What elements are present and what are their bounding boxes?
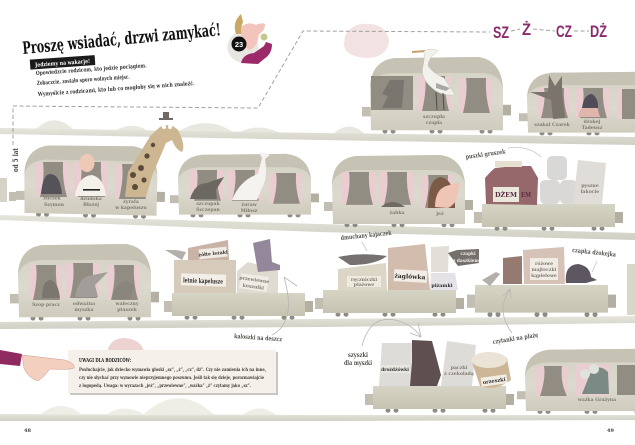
partial wagon right edge	[627, 264, 635, 315]
wagon A: zuczek, dzudoka, zyrafa: Szymon	[44, 202, 65, 208]
wagon E: zabka, jez: żabka	[390, 210, 404, 216]
jackal	[530, 75, 565, 119]
drozdzowki bag	[379, 343, 412, 386]
parents note: Posłuchajcie, jak dziecko wymawia głoski „sz”, „ż”, „cz”, dż”. Czy nie zamienia ich na inne,	[79, 367, 266, 373]
flat wagon F: jars and cans: DŻEM	[495, 190, 517, 199]
mascot with number 23: 23	[235, 40, 243, 49]
label: kaloszki na deszcz: kaloszki na deszcz	[234, 333, 283, 343]
flat wagon J: books, box, cap	[467, 247, 616, 317]
jam jars	[485, 166, 538, 205]
flat wagon L: food	[365, 340, 514, 413]
box: zolte lezaki	[188, 240, 229, 262]
mouse peeking	[165, 250, 186, 260]
box	[573, 160, 606, 204]
label: szyszki dla myszki	[344, 319, 421, 367]
paczki bag	[441, 341, 476, 386]
label: dmuchany kajaczek: dmuchany kajaczek	[340, 230, 392, 242]
flat wagon F: jars and cans: pyszne	[581, 184, 599, 189]
wagon B: szczupak, zuraw: szczupak	[196, 201, 220, 207]
crane	[232, 152, 270, 200]
rails	[0, 128, 635, 421]
label: dmuchany kajaczek	[340, 230, 392, 251]
wagon D: szakal, dzokej: dżokej	[584, 119, 601, 125]
subtitle tag: Jedziemy na wakacje!	[34, 59, 90, 69]
judoka	[75, 175, 106, 196]
sound letters: CZ	[556, 22, 572, 41]
label: szyszki dla myszki: dla myszki	[344, 360, 372, 367]
wagon A: zuczek, dzudoka, zyrafa: żyrafa	[123, 199, 139, 205]
wagon E: zabka, jez	[324, 155, 473, 227]
boots	[253, 239, 280, 272]
kayak	[338, 254, 387, 265]
wagon A: zuczek, dzudoka, zyrafa: dżudoka	[80, 196, 102, 202]
instructions	[36, 63, 195, 98]
title: Proszę wsiadać, drzwi zamykać!	[22, 20, 222, 59]
text: 49	[607, 428, 614, 434]
flat wagon L: food: orzeszki	[482, 377, 506, 386]
wagon G: szop, myszka, ptaszek: Szop pracz	[32, 302, 60, 308]
wagon D: szakal, dzokej	[519, 72, 635, 135]
label: czapka dzokejka: czapka dżokejka	[572, 247, 616, 259]
box: przewiewne koszulki	[237, 262, 278, 293]
sound letters: Ż	[522, 20, 531, 39]
wagon D: szakal, dzokej: Tadeusz	[582, 125, 603, 131]
wagon B: szczupak, zuraw: żuraw	[241, 202, 258, 208]
flat wagon H: boxes and boots: żółte leżaki	[198, 248, 228, 259]
flat wagon I: kajak and boxes: z daszkiem	[453, 258, 479, 263]
flat wagon H: boxes and boots: koszulki	[242, 283, 265, 292]
label: puszki gruszek: puszki gruszek	[465, 148, 506, 161]
flat wagon J: books, box, cap: różowe	[535, 260, 553, 267]
wagon E: zabka, jez: jeż	[435, 211, 444, 217]
wagon G: szop, myszka, ptaszek	[10, 244, 159, 321]
label: szyszki dla myszki: szyszki	[348, 352, 369, 359]
dragonfly	[582, 367, 609, 394]
jockey	[578, 101, 600, 117]
partial wagon left edge	[0, 178, 16, 202]
flat wagon J: books, box, cap: kąpielowe	[531, 273, 557, 279]
nuts tin	[472, 355, 511, 388]
cap	[566, 264, 597, 283]
pine cone	[410, 340, 441, 386]
wagon A: zuczek, dzudoka, zyrafa: Błażej	[83, 202, 99, 208]
sailboat box	[388, 244, 430, 290]
label: czytanki na plaze	[492, 289, 539, 346]
pike	[190, 177, 224, 199]
sound letters: DŻ	[590, 22, 607, 41]
pyjamas	[430, 273, 458, 290]
caps	[431, 246, 449, 272]
sound letters	[493, 20, 607, 42]
wagon A: zuczek, dzudoka, zyrafa	[15, 112, 183, 219]
wagon C: czapla: szczupła	[423, 114, 445, 120]
instructions: Zobaczcie, zostało sporo wolnych miejsc.	[37, 75, 130, 87]
flat wagon H: boxes and boots	[164, 239, 313, 320]
flat wagon I: kajak and boxes: żaglówka	[394, 273, 426, 281]
wagon B: szczupak, zuraw	[170, 152, 319, 217]
wagon G: szop, myszka, ptaszek: myszka	[75, 307, 93, 313]
wagon B: szczupak, zuraw: Miłosz	[241, 208, 258, 214]
wagon C: czapla	[362, 49, 511, 134]
wagon B: szczupak, zuraw: Szczepan	[196, 207, 221, 213]
flat wagon I: kajak and boxes	[315, 244, 479, 317]
hills: top track	[36, 120, 366, 136]
pointing hand	[0, 350, 74, 381]
pink cloud behind note	[107, 338, 144, 352]
box	[523, 247, 565, 284]
label: czapka dzokejka	[572, 247, 616, 272]
hills: bottom track	[41, 398, 276, 415]
flat wagon F: jars and cans	[474, 156, 623, 231]
box: letnie kapelusze	[174, 260, 236, 293]
mascot with number 23	[228, 14, 272, 64]
pink cloud	[344, 24, 389, 58]
towel box	[338, 263, 387, 290]
flat wagon H: boxes and boots: letnie kapelusze	[183, 276, 223, 286]
beetle	[41, 174, 62, 194]
hedgehog	[428, 177, 455, 208]
flat wagon I: kajak and boxes: ręczniczki	[351, 277, 377, 283]
wagon G: szop, myszka, ptaszek: odważna	[73, 301, 95, 307]
flat wagon I: kajak and boxes: czapki	[460, 251, 476, 256]
instructions: Wymyślcie z rodzicami, kto lub co mogłoby się w nich znaleźć.	[37, 80, 195, 98]
heron	[412, 49, 455, 110]
parents note: czy nie słychać przy wymowie nieprzyjemnego poszumu. Jeśli tak się dzieje, porozmawiajcie	[79, 374, 264, 381]
flat wagon L: food: pączki	[451, 365, 468, 371]
wagon D: szakal, dzokej: szakal Czarek	[534, 122, 571, 128]
wagon G: szop, myszka, ptaszek: ptaszek	[117, 307, 138, 313]
dashed route line	[13, 29, 589, 145]
wagon A: zuczek, dzudoka, zyrafa: w kapeluszu	[114, 205, 147, 211]
parents note: UWAGI DLA RODZICÓW:	[79, 356, 131, 364]
books	[503, 256, 522, 284]
label: kaloszki na deszcz	[234, 277, 297, 343]
flat wagon L: food: z czekoladą	[444, 371, 474, 377]
wagon C: czapla: czapla	[426, 120, 442, 126]
wagon K: wazka: ważka Grażyna	[577, 397, 616, 403]
flat wagon H: boxes and boots: przewiewne	[239, 275, 270, 285]
parents note	[68, 350, 278, 395]
label: czytanki na plaze: czytanki na plażę	[492, 332, 539, 346]
flat wagon I: kajak and boxes: piżamki	[431, 283, 453, 289]
flat wagon J: books, box, cap: majteczki	[532, 267, 557, 273]
age label: od 5 lat	[11, 147, 20, 172]
page numbers: 48	[24, 428, 31, 434]
flat wagon F: jars and cans: łakocie	[581, 189, 599, 195]
giraffe	[125, 125, 183, 197]
subtitle tag	[30, 55, 95, 70]
wagon K: wazka	[517, 349, 635, 414]
flat wagon L: food: drożdżówki	[381, 368, 409, 373]
instructions: Opowiedzcie rodzicom, kto jedzie pociągiem.	[36, 63, 147, 77]
wagon G: szop, myszka, ptaszek: waleczny	[114, 301, 139, 307]
label: puszki gruszek	[465, 147, 541, 161]
cans	[540, 156, 577, 204]
flat wagon F: jars and cans: EM	[521, 191, 531, 199]
sound letters: SZ	[493, 23, 509, 42]
wagon A: zuczek, dzudoka, zyrafa: żuczek	[43, 196, 62, 202]
parents note: z logopedą. Uwaga: w wyrazach „jeż”, „przewiewne”, „ważka” „ż” czytamy jako „sz”.	[79, 383, 251, 389]
flat wagon I: kajak and boxes: plażowe	[354, 282, 374, 288]
